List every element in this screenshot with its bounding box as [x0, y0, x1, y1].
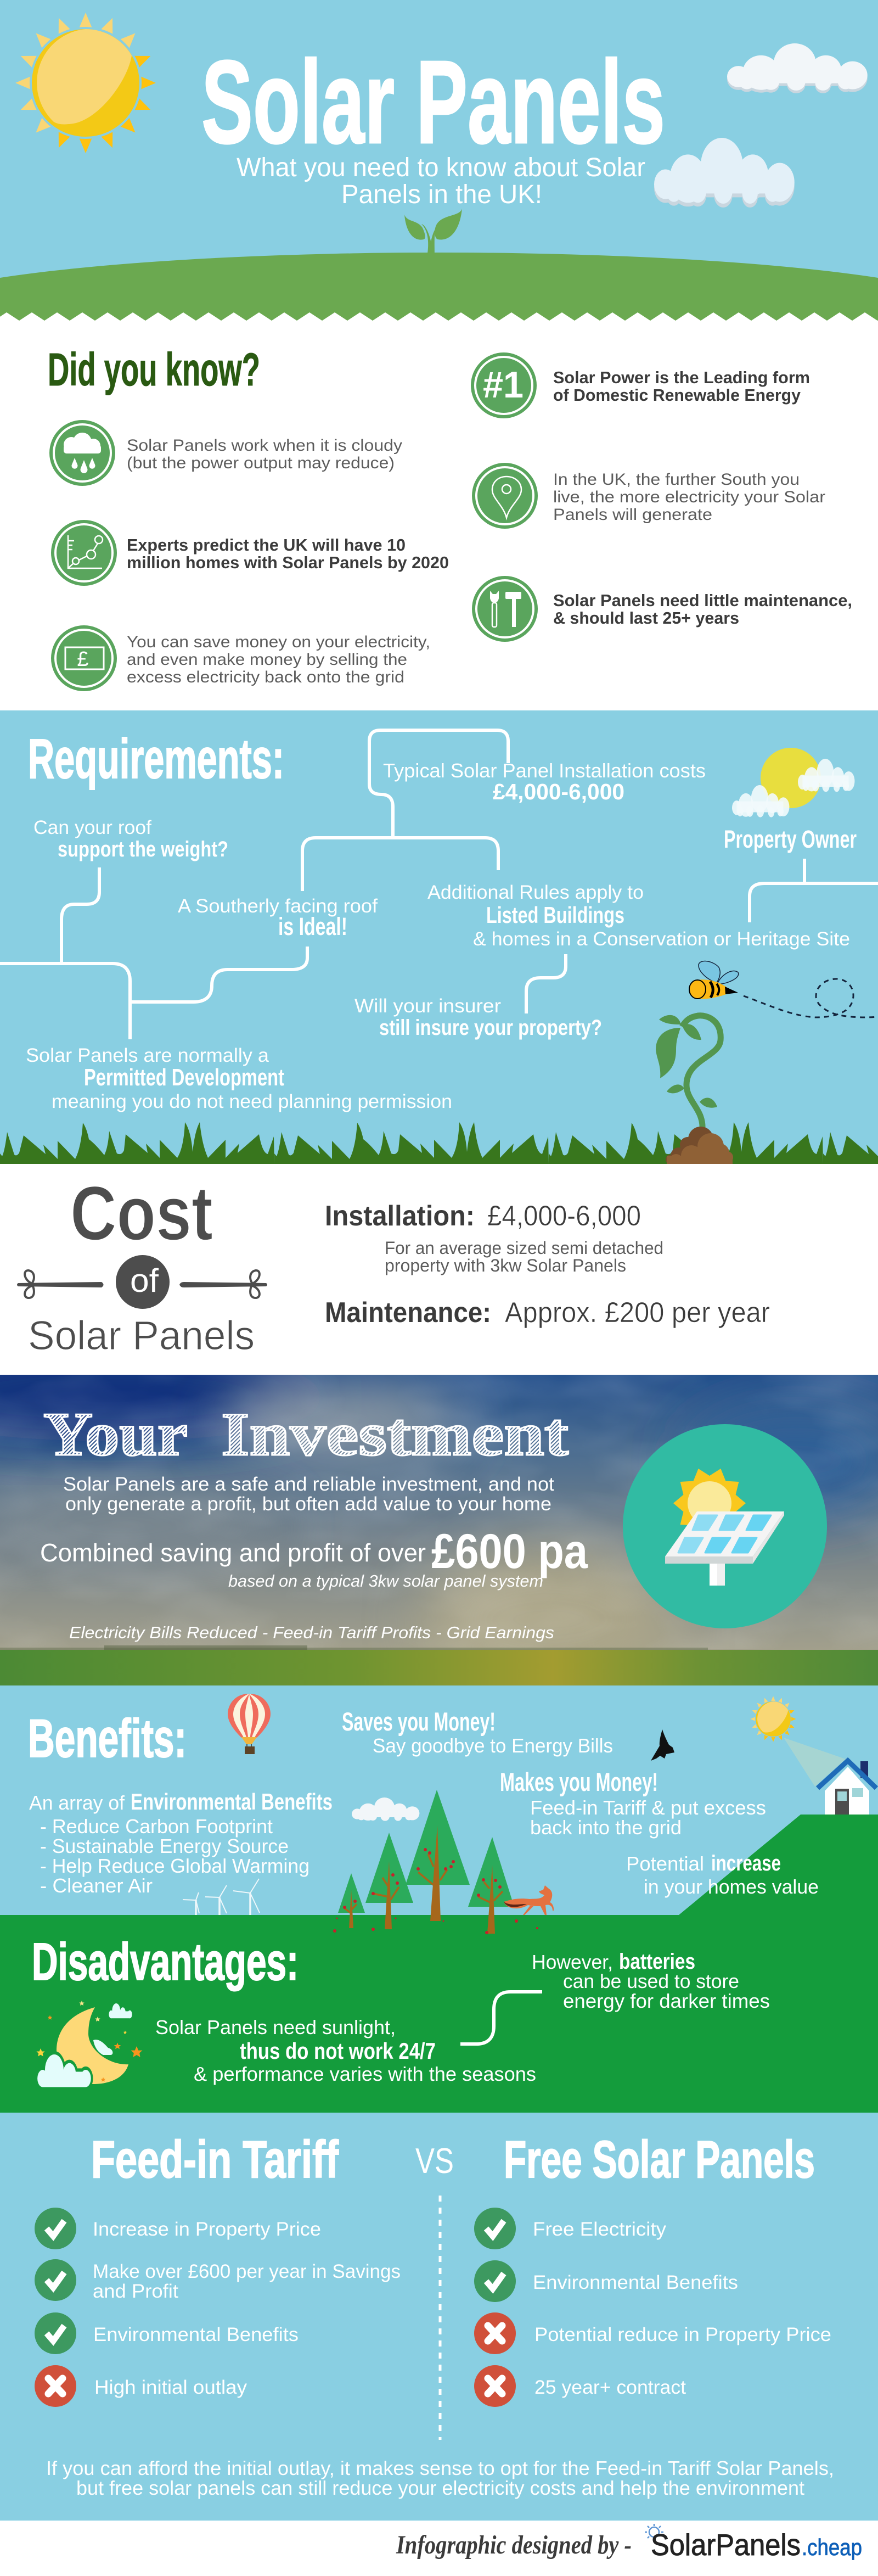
item: make over 600: and Profit: [93, 2281, 178, 2302]
connector lines: [0, 730, 878, 1039]
text: installation cost: property with 3kw Solar Panels: [385, 1256, 626, 1275]
subtitle: [237, 153, 645, 209]
heading: cost of solar panels: Solar Panels: [28, 1313, 255, 1358]
text: home value: in your homes value: [644, 1875, 819, 1898]
text: environmental benefits: - Cleaner Air: [40, 1874, 153, 1897]
panel: footer: [0, 2521, 878, 2576]
text: home value: Potential: [626, 1852, 704, 1875]
panel: header: [0, 0, 878, 379]
text: income sources: Electricity Bills Reduced - Feed-in Tariff Profits - Grid Earnings: [69, 1623, 554, 1642]
heading: your investment: Your: [43, 1401, 188, 1469]
panel: your investment: [0, 1353, 878, 1691]
fact: leading renewable: Solar Power is the Leading form: [553, 368, 810, 387]
item: environmental benefits: Environmental Benefits: [533, 2272, 738, 2293]
heading: cost of solar panels: of: [130, 1262, 159, 1299]
text: roof weight: Can your roof: [33, 817, 151, 838]
text: conclusion: If you can afford the initial outlay, it makes sense to opt for the Feed-in Tariff Solar Panels,: [46, 2457, 834, 2479]
item: high initial outlay: [35, 2365, 247, 2407]
text: batteries: energy for darker times: [563, 1990, 770, 2012]
text: insurer: still insure your property?: [379, 1016, 602, 1040]
fact: little maintenance: [472, 576, 852, 642]
heading: cost of solar panels: Cost: [70, 1170, 213, 1256]
text: environmental benefits: [29, 1789, 333, 1897]
fact: save money: [51, 625, 430, 691]
heading: cost of solar panels: [17, 1170, 267, 1358]
heading: your investment: [43, 1401, 569, 1469]
text: south facing roof: is Ideal!: [278, 912, 347, 940]
icon: hot air balloon: [228, 1694, 271, 1754]
text: installation cost: Installation:: [325, 1200, 475, 1232]
icon: house: [818, 1761, 876, 1815]
text: intro: only generate a profit, but often add value to your home: [65, 1493, 551, 1515]
heading: Did you know?: [48, 344, 260, 395]
fact: further south: [472, 463, 825, 529]
text: permitted development: Permitted Development: [84, 1064, 284, 1091]
subtitle: Panels in the UK!: [341, 180, 542, 209]
item: environmental benefits: Environmental Benefits: [93, 2324, 299, 2345]
text: environmental benefits: - Sustainable Energy Source: [40, 1835, 289, 1857]
text: makes money: [500, 1767, 766, 1839]
text: batteries: However,: [532, 1951, 613, 1973]
panel: requirements: [0, 710, 878, 1167]
icon: number one: #1: [483, 364, 524, 406]
icon: solar panel with sun: [623, 1424, 827, 1628]
text: intro: Solar Panels are a safe and reliable investment, and not: [63, 1474, 554, 1495]
fact: experts predict: million homes with Solar Panels by 2020: [127, 553, 449, 572]
text: roof weight: [33, 817, 228, 861]
icon: sun and clouds: [732, 748, 854, 817]
item: make over 600: Make over £600 per year in Savings: [93, 2261, 401, 2282]
icon: fox: [504, 1885, 554, 1915]
icon: number one: [471, 352, 537, 418]
text: environmental benefits: - Help Reduce Global Warming: [40, 1855, 309, 1877]
item: environmental benefits: [474, 2260, 738, 2302]
fact: further south: Panels will generate: [553, 506, 712, 524]
item: increase in property price: Increase in Property Price: [93, 2219, 321, 2240]
icon: forest trees: [333, 1790, 538, 1934]
item: potential reduce: [474, 2312, 831, 2354]
text: maintenance cost: [325, 1297, 770, 1329]
text: environmental benefits: Environmental Benefits: [131, 1789, 333, 1815]
hill: [679, 1815, 878, 1915]
icon: cloud lower right: [654, 138, 795, 208]
icon: small sun: [750, 1696, 796, 1742]
text: batteries: [532, 1950, 770, 2012]
item: increase in property price: [35, 2208, 321, 2249]
fact: save money: You can save money on your electricity,: [127, 633, 430, 651]
panel: disadvantages: [0, 1933, 878, 2113]
text: need sunlight: Solar Panels need sunlight,: [155, 2016, 396, 2039]
text: insurer: Will your insurer: [354, 995, 501, 1017]
text: permitted development: meaning you do not need planning permission: [52, 1091, 452, 1112]
icon: wrench and hammer: [472, 576, 538, 642]
text: maintenance cost: Approx. £200 per year: [505, 1297, 770, 1329]
text: permitted development: [26, 1045, 452, 1112]
grass: [0, 1122, 878, 1164]
text: need sunlight: & performance varies with the seasons: [194, 2063, 536, 2085]
fact: further south: live, the more electricity your Solar: [553, 488, 825, 506]
item: high initial outlay: High initial outlay: [94, 2377, 247, 2398]
panel: feed-in tariff vs free solar panels: [0, 2113, 878, 2521]
icon: sun: [15, 13, 156, 153]
heading: your investment: Investment: [221, 1401, 569, 1469]
icon: bee with dotted trail: [689, 961, 878, 1017]
fact: little maintenance: Solar Panels need little maintenance,: [553, 591, 852, 610]
text: environmental benefits: - Reduce Carbon Footprint: [40, 1815, 273, 1838]
text: makes money: Makes you Money!: [500, 1767, 658, 1796]
text: south facing roof: [178, 895, 378, 940]
fact: leading renewable: [471, 352, 810, 418]
text: saving figure: based on a typical 3kw solar panel system: [228, 1571, 543, 1591]
heading: feed-in tariff: Feed-in Tariff: [91, 2130, 339, 2189]
text: saves money: Saves you Money!: [342, 1707, 496, 1736]
text: permitted development: Solar Panels are normally a: [26, 1045, 269, 1066]
logo text: SolarPanels: [651, 2528, 801, 2562]
text: credit: Infographic designed by -: [396, 2530, 632, 2560]
fact: leading renewable: of Domestic Renewable Energy: [553, 385, 801, 405]
text: conclusion: [46, 2457, 834, 2499]
text: conclusion: but free solar panels can still reduce your electricity costs and help the environment: [76, 2477, 804, 2499]
fact: save money: excess electricity back onto the grid: [127, 668, 404, 686]
text: installation cost: [383, 759, 706, 804]
heading: Benefits:: [28, 1708, 187, 1768]
text: need sunlight: [155, 2016, 536, 2085]
icon: cloud top right: [727, 43, 868, 93]
fact: little maintenance: & should last 25+ years: [553, 608, 739, 628]
heading: Disadvantages:: [32, 1933, 299, 1991]
subtitle: What you need to know about Solar: [237, 153, 645, 182]
text: makes money: back into the grid: [530, 1816, 682, 1839]
icon: plant growing from soil: [656, 1015, 733, 1167]
text: saving figure: £600 pa: [431, 1524, 588, 1578]
fact: cloudy: (but the power output may reduce): [127, 454, 395, 472]
heading: Requirements:: [28, 727, 284, 790]
icon: rain cloud: [49, 420, 115, 486]
fact: cloudy: [49, 420, 402, 486]
text: saving figure: [40, 1524, 588, 1591]
text: installation cost: [325, 1200, 663, 1275]
text: installation cost: For an average sized semi detached: [385, 1238, 663, 1258]
icon: logo sun: [645, 2524, 663, 2538]
text: insurer: [354, 995, 602, 1040]
item: free electricity: Free Electricity: [533, 2219, 667, 2240]
panel: benefits: [0, 1685, 878, 1948]
text: listed buildings: Additional Rules apply to: [427, 882, 644, 903]
text: south facing roof: A Southerly facing roof: [178, 895, 378, 917]
text: environmental benefits: An array of: [29, 1791, 125, 1814]
item: environmental benefits: [35, 2312, 299, 2354]
text: installation cost: £4,000-6,000: [487, 1200, 641, 1232]
text: installation cost: Typical Solar Panel Installation costs: [383, 759, 706, 782]
icon: bird: [651, 1729, 674, 1761]
text: listed buildings: Listed Buildings: [486, 902, 624, 928]
icon: map pin: [472, 463, 538, 529]
icon: wind turbines: [183, 1879, 260, 1915]
icon: small cloud: [352, 1797, 419, 1821]
panel: cost: [0, 1164, 878, 1375]
photo background: sky and field: [0, 1353, 878, 1691]
list: free solar panels: [474, 2208, 831, 2407]
text: listed buildings: [427, 882, 850, 950]
text: batteries: can be used to store: [563, 1970, 739, 1992]
connector line: [460, 1992, 542, 2044]
text: home value: [626, 1851, 819, 1898]
icon: line chart: [51, 520, 117, 586]
item: potential reduce: Potential reduce in Property Price: [534, 2324, 831, 2345]
logo text: .cheap: [802, 2534, 862, 2560]
text: saving figure: Combined saving and profit of over: [40, 1538, 426, 1567]
fact: experts predict: Experts predict the UK will have 10: [127, 535, 406, 555]
text: makes money: Feed-in Tariff & put excess: [530, 1796, 766, 1819]
icon: moon and clouds: [36, 2001, 142, 2087]
fact: cloudy: Solar Panels work when it is cloudy: [127, 436, 402, 455]
icon: banknote: [51, 625, 117, 691]
item: 25 year contract: 25 year+ contract: [534, 2377, 686, 2398]
fact: further south: In the UK, the further South you: [553, 471, 800, 489]
icon: banknote: £: [77, 648, 89, 671]
hill with zigzag edge: [0, 253, 878, 379]
fact: experts predict: [51, 520, 449, 586]
item: 25 year contract: [474, 2365, 686, 2407]
fact: save money: and even make money by selling the: [127, 651, 407, 669]
item: free electricity: [474, 2208, 667, 2249]
text: saves money: Say goodbye to Energy Bills: [373, 1734, 613, 1757]
list: feed-in tariff: [35, 2208, 401, 2407]
text: installation cost: £4,000-6,000: [493, 779, 624, 804]
panel: did you know: [0, 321, 878, 710]
item: make over 600: [35, 2259, 401, 2302]
text: home value: increase: [711, 1851, 781, 1875]
text: roof weight: support the weight?: [58, 837, 228, 861]
text: saves money: [342, 1707, 613, 1757]
heading: vs: VS: [415, 2141, 454, 2181]
text: listed buildings: & homes in a Conservation or Heritage Site: [473, 928, 850, 950]
text: intro: [63, 1474, 554, 1515]
text: maintenance cost: Maintenance:: [325, 1297, 491, 1329]
icon: sun beam: [784, 1738, 846, 1787]
text: need sunlight: thus do not work 24/7: [240, 2038, 436, 2064]
icon: sprout: [404, 209, 462, 254]
text: batteries: batteries: [619, 1950, 695, 1974]
